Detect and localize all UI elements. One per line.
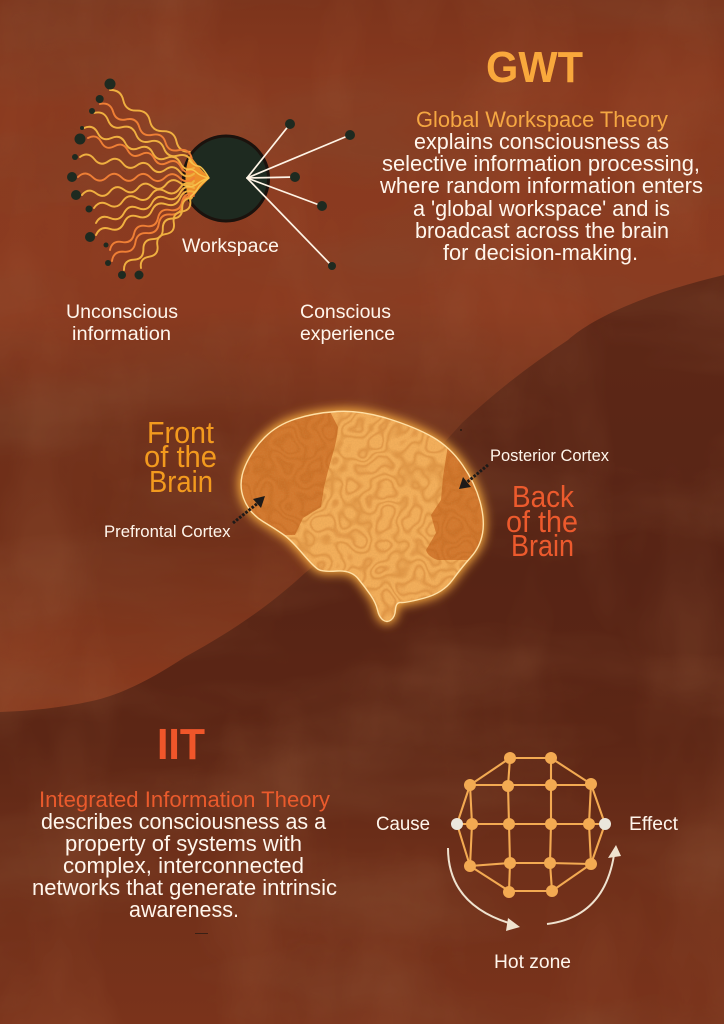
curved arrow: hot zone to effect: [547, 845, 621, 924]
label: workspace: Workspace: [182, 236, 279, 257]
GWT description: a 'global workspace' and is: [413, 196, 670, 221]
label: front of the brain: Front: [147, 415, 214, 450]
GWT heading: GWT: [486, 43, 583, 92]
dark wave band: [0, 275, 724, 1024]
GWT description: [379, 107, 703, 265]
IIT description: complex, interconnected: [63, 853, 304, 878]
prefrontal region: [242, 412, 338, 535]
conscious nodes: [285, 119, 355, 270]
label: unconscious information: information: [72, 324, 171, 345]
conscious broadcast lines: [247, 124, 350, 266]
GWT description: broadcast across the brain: [415, 218, 669, 243]
label: conscious experience: [300, 302, 395, 345]
label: conscious experience: experience: [300, 324, 395, 345]
IIT description: [32, 787, 337, 922]
IIT description: property of systems with: [65, 831, 302, 856]
brain illustration: [225, 400, 495, 630]
label: back of the brain: of the: [506, 504, 578, 539]
label: conscious experience: Conscious: [300, 302, 391, 323]
unconscious nodes: [67, 78, 144, 280]
flame highlights: [186, 160, 209, 197]
label: hot zone: Hot zone: [494, 952, 571, 973]
brain outline: [241, 411, 483, 622]
unconscious wavy lines: [78, 90, 194, 270]
label: back of the brain: Brain: [511, 528, 574, 563]
IIT heading: IIT: [157, 720, 205, 769]
label: unconscious information: Unconscious: [66, 302, 178, 323]
IIT description: Integrated Information Theory: [39, 787, 331, 812]
label: prefrontal cortex: Prefrontal Cortex: [104, 523, 231, 541]
GWT description: where random information enters: [379, 173, 703, 198]
GWT diagram: [66, 78, 395, 345]
IIT description: awareness.: [129, 897, 239, 922]
label: front of the brain: of the: [144, 439, 217, 474]
brain folds: [243, 412, 482, 620]
brain glow: [241, 411, 483, 622]
brain body: [242, 412, 482, 621]
GWT description: for decision-making.: [443, 240, 638, 265]
GWT description: selective information processing,: [382, 151, 700, 176]
small speck: [460, 429, 462, 431]
workspace flame: [186, 155, 210, 202]
IIT network diagram: [376, 752, 679, 973]
cause and effect nodes: [451, 818, 611, 830]
label: front of the brain: Brain: [149, 464, 213, 499]
GWT description: explains consciousness as: [414, 129, 669, 154]
network nodes: [464, 752, 597, 898]
label: back of the brain: Back: [512, 479, 574, 514]
small dash: [195, 933, 208, 934]
label: back of the brain: [506, 479, 578, 563]
label: effect: Effect: [629, 814, 679, 835]
label: unconscious information: [66, 302, 178, 345]
curved arrow: cause to hot zone: [448, 848, 520, 931]
GWT description: Global Workspace Theory: [416, 107, 669, 132]
network edges: [457, 758, 605, 892]
label: posterior cortex: Posterior Cortex: [490, 447, 610, 465]
label: front of the brain: [144, 415, 217, 499]
IIT description: networks that generate intrinsic: [32, 875, 337, 900]
workspace circle: [184, 136, 268, 221]
arrow: posterior cortex: [459, 465, 488, 489]
label: cause: Cause: [376, 814, 430, 835]
arrow: prefrontal cortex: [233, 496, 265, 523]
IIT description: describes consciousness as a: [41, 809, 326, 834]
posterior region: [426, 449, 483, 560]
